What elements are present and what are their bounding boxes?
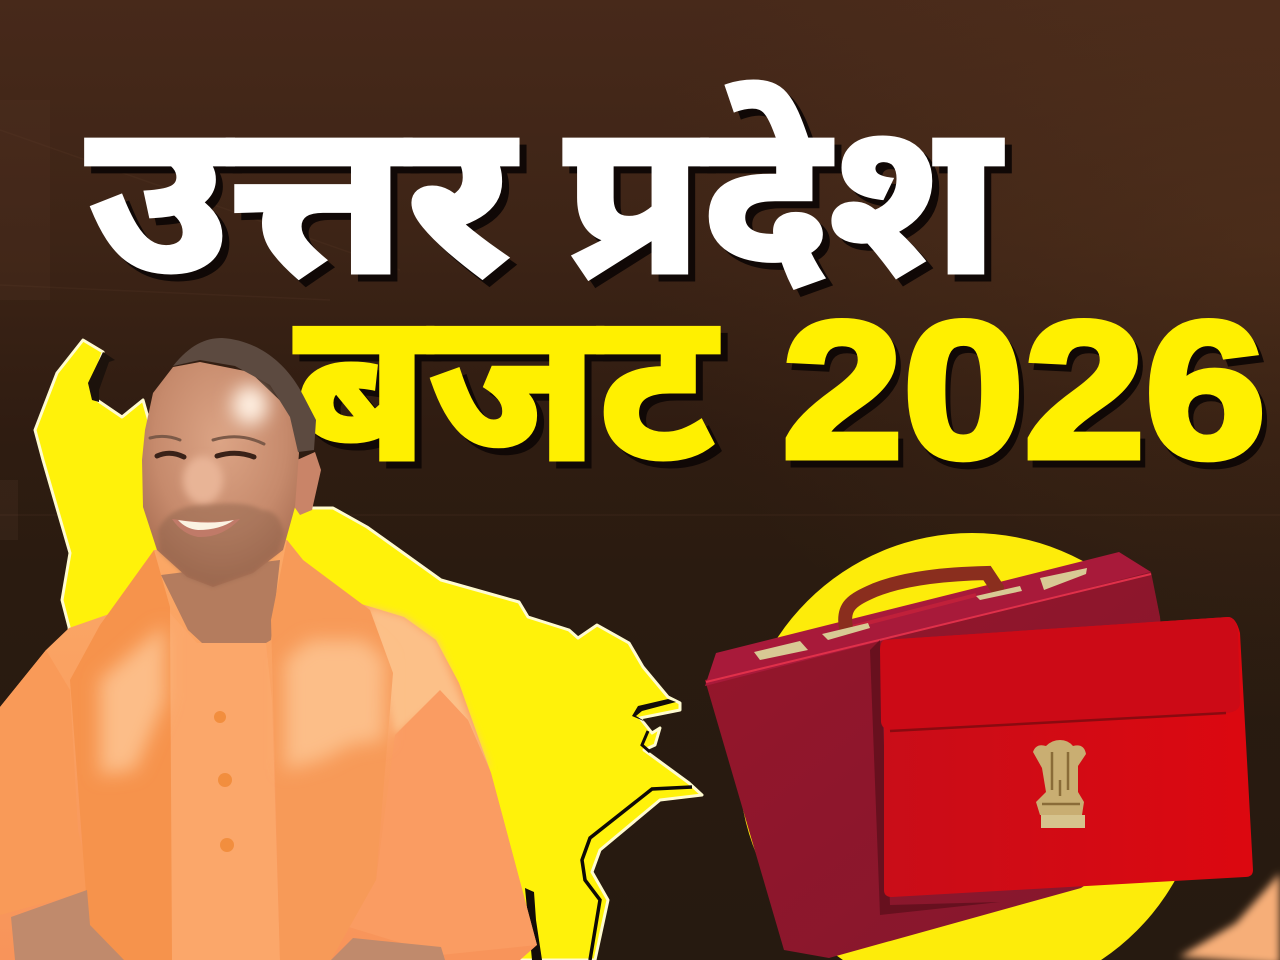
beard stubble <box>158 503 284 587</box>
scarf right <box>271 540 393 960</box>
main title: Uttar Pradesh <box>87 80 1009 324</box>
briefcase back body <box>705 572 1180 958</box>
neck <box>161 560 280 643</box>
orange flame glow bottom right <box>1179 873 1280 960</box>
scarf right highlight <box>285 640 385 770</box>
forehead highlight <box>232 385 268 425</box>
word: Uttar: उत्तर <box>87 80 517 317</box>
ear <box>293 452 321 515</box>
lid edge highlight <box>706 574 1151 682</box>
front pocket <box>884 617 1253 897</box>
yellow circle behind briefcase <box>739 533 1205 960</box>
lions <box>1033 740 1086 815</box>
person: smiling man in saffron robe <box>0 338 537 960</box>
lid top face <box>705 552 1151 686</box>
number: 2026: 2026 <box>782 282 1266 499</box>
shadow of pocket <box>870 640 1000 915</box>
word: Uttar shadow: उत्तर <box>94 87 524 324</box>
left sleeve <box>0 650 92 915</box>
plinth <box>1041 815 1085 828</box>
handle strap <box>848 595 976 628</box>
word: Pradesh: प्रदेश <box>565 80 1002 317</box>
briefcase <box>705 552 1253 958</box>
robe body <box>0 540 537 960</box>
right sleeve shade <box>342 690 537 955</box>
eyebrows <box>150 436 264 444</box>
pocket flap <box>880 617 1240 730</box>
flap shadow line <box>890 713 1226 731</box>
handle <box>845 573 997 628</box>
nose highlight <box>183 456 223 504</box>
kurta centre panel <box>170 613 280 960</box>
word: Budget: बजट <box>295 269 718 504</box>
left hand <box>11 890 124 960</box>
lip and smile <box>172 519 240 537</box>
scarf left highlight <box>100 625 165 775</box>
gold clasps <box>754 568 1087 660</box>
number: 2026 shadow: 2026 <box>787 289 1271 506</box>
scarf left <box>70 550 172 960</box>
right hand <box>331 938 445 960</box>
word: Budget shadow: बजट <box>302 276 725 511</box>
yellow map of Uttar Pradesh <box>35 340 702 960</box>
hair <box>173 338 316 452</box>
gold emblem: national emblem of India <box>1033 740 1086 828</box>
teeth <box>178 520 234 530</box>
subtitle: Budget 2026 <box>295 269 1271 511</box>
word: Pradesh shadow: प्रदेश <box>572 87 1009 324</box>
right shoulder highlight <box>367 607 490 770</box>
kurta buttons <box>214 711 234 852</box>
eyes <box>157 453 254 457</box>
head <box>142 362 299 587</box>
emblem shading <box>1042 752 1080 804</box>
